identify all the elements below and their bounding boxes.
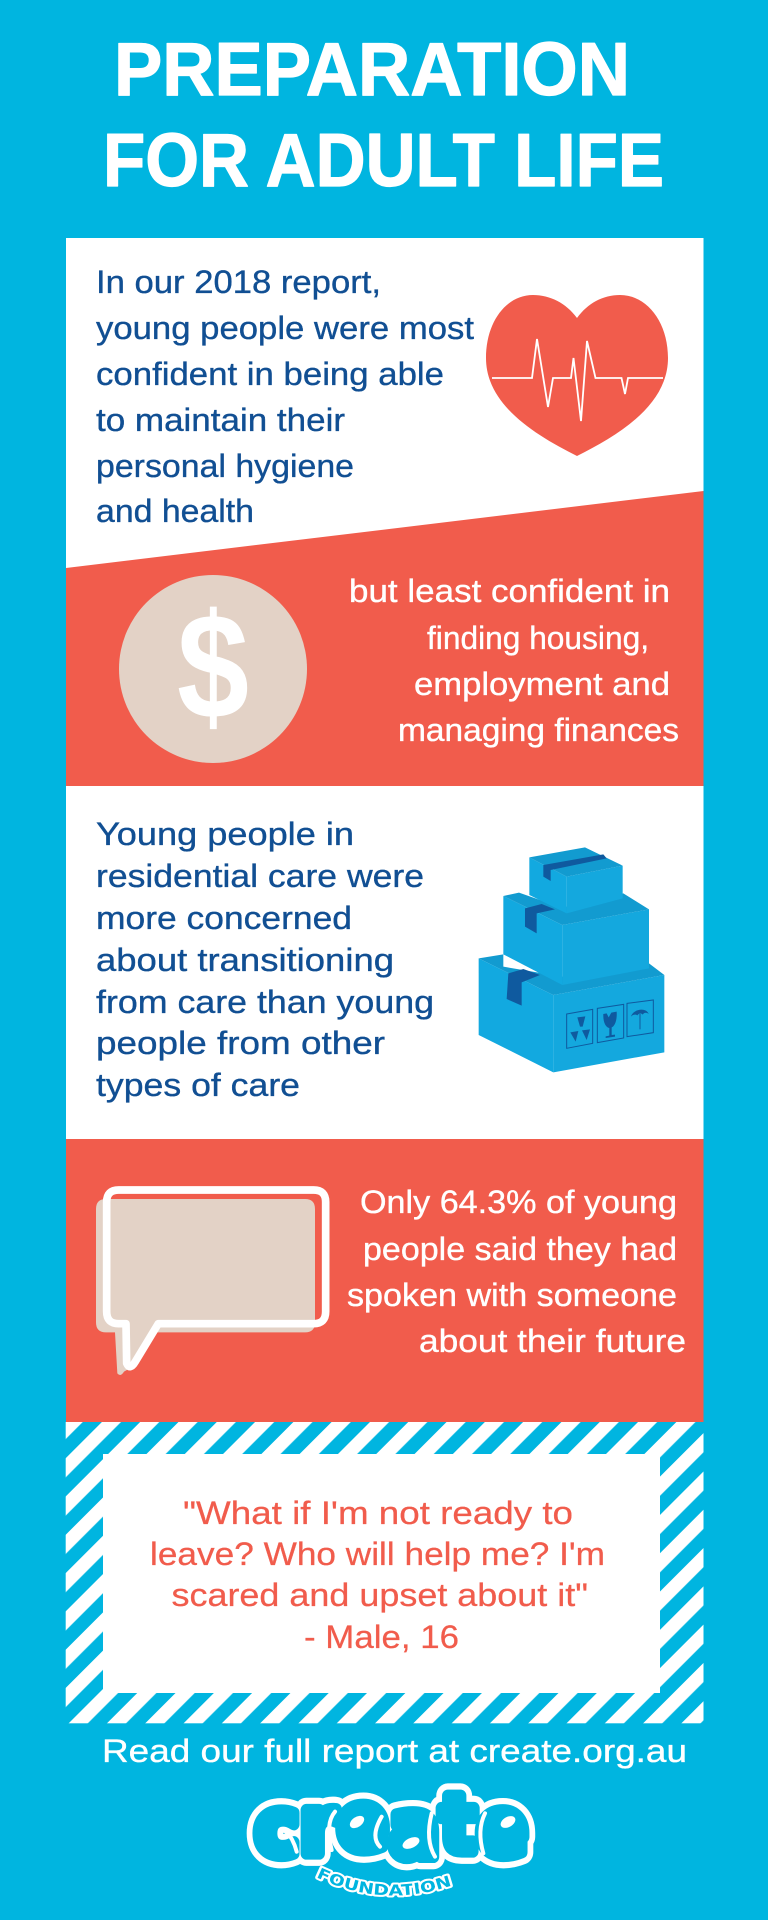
text: spoken about future: Only 64.3% of young [360,1184,677,1220]
text: residential care: types of care [96,1067,300,1103]
title: FOR ADULT LIFE [103,118,664,202]
text: residential care: people from other [96,1025,385,1061]
text: most confident: In our 2018 report, [96,264,381,300]
panel: most confident [66,238,704,569]
text: most confident: confident in being able [96,356,444,392]
text: most confident [96,264,474,529]
text: quote: leave? Who will help me? I'm [150,1536,605,1572]
icon: umbrella [627,1000,653,1037]
logo: create foundation: FOUNDATION [315,1866,453,1898]
logo: create foundation: create [255,1777,527,1876]
text: most confident: young people were most [96,310,474,346]
text: residential care: more concerned [96,900,352,936]
panel: residential care [66,786,704,1140]
icon: heart with heartbeat [486,295,668,456]
text: least confident: but least confident in [349,573,670,609]
text: least confident: managing finances [398,712,679,748]
text: most confident: and health [96,493,254,529]
text: spoken about future: spoken with someone [347,1277,677,1313]
text: quote: scared and upset about it" [172,1577,588,1613]
title [103,27,664,202]
text: spoken about future [347,1184,686,1359]
text: residential care: residential care were [96,858,424,894]
text: quote: - Male, 16 [304,1619,459,1655]
icon: dollar coin: $ [177,582,249,750]
icon: stacked boxes [479,847,664,1072]
text: residential care: Young people in [96,816,354,852]
text: residential care: about transitioning [96,942,394,978]
text: residential care: from care than young [96,984,434,1020]
text: spoken about future: people said they had [363,1231,677,1267]
text: quote [150,1495,605,1655]
text: most confident: personal hygiene [96,448,354,484]
text: residential care [96,816,434,1103]
panel: spoken about future [66,1139,704,1422]
panel: least confident [66,491,704,786]
text: least confident: employment and [414,666,670,702]
text: least confident: finding housing, [427,620,649,656]
text: least confident [349,573,679,748]
text: quote: "What if I'm not ready to [183,1495,573,1531]
title: PREPARATION [114,27,630,111]
icon: fragile glass [597,1004,624,1043]
icon: dollar coin [119,575,307,763]
text: most confident: to maintain their [96,402,345,438]
icon: speech bubble [96,1190,326,1375]
icon: radiation symbol [567,1009,593,1048]
text: read full report: Read our full report at create.org.au [102,1733,687,1769]
text: spoken about future: about their future [419,1323,686,1359]
logo: create foundation: create [255,1777,527,1876]
panel: quote with striped border [66,1422,703,1723]
